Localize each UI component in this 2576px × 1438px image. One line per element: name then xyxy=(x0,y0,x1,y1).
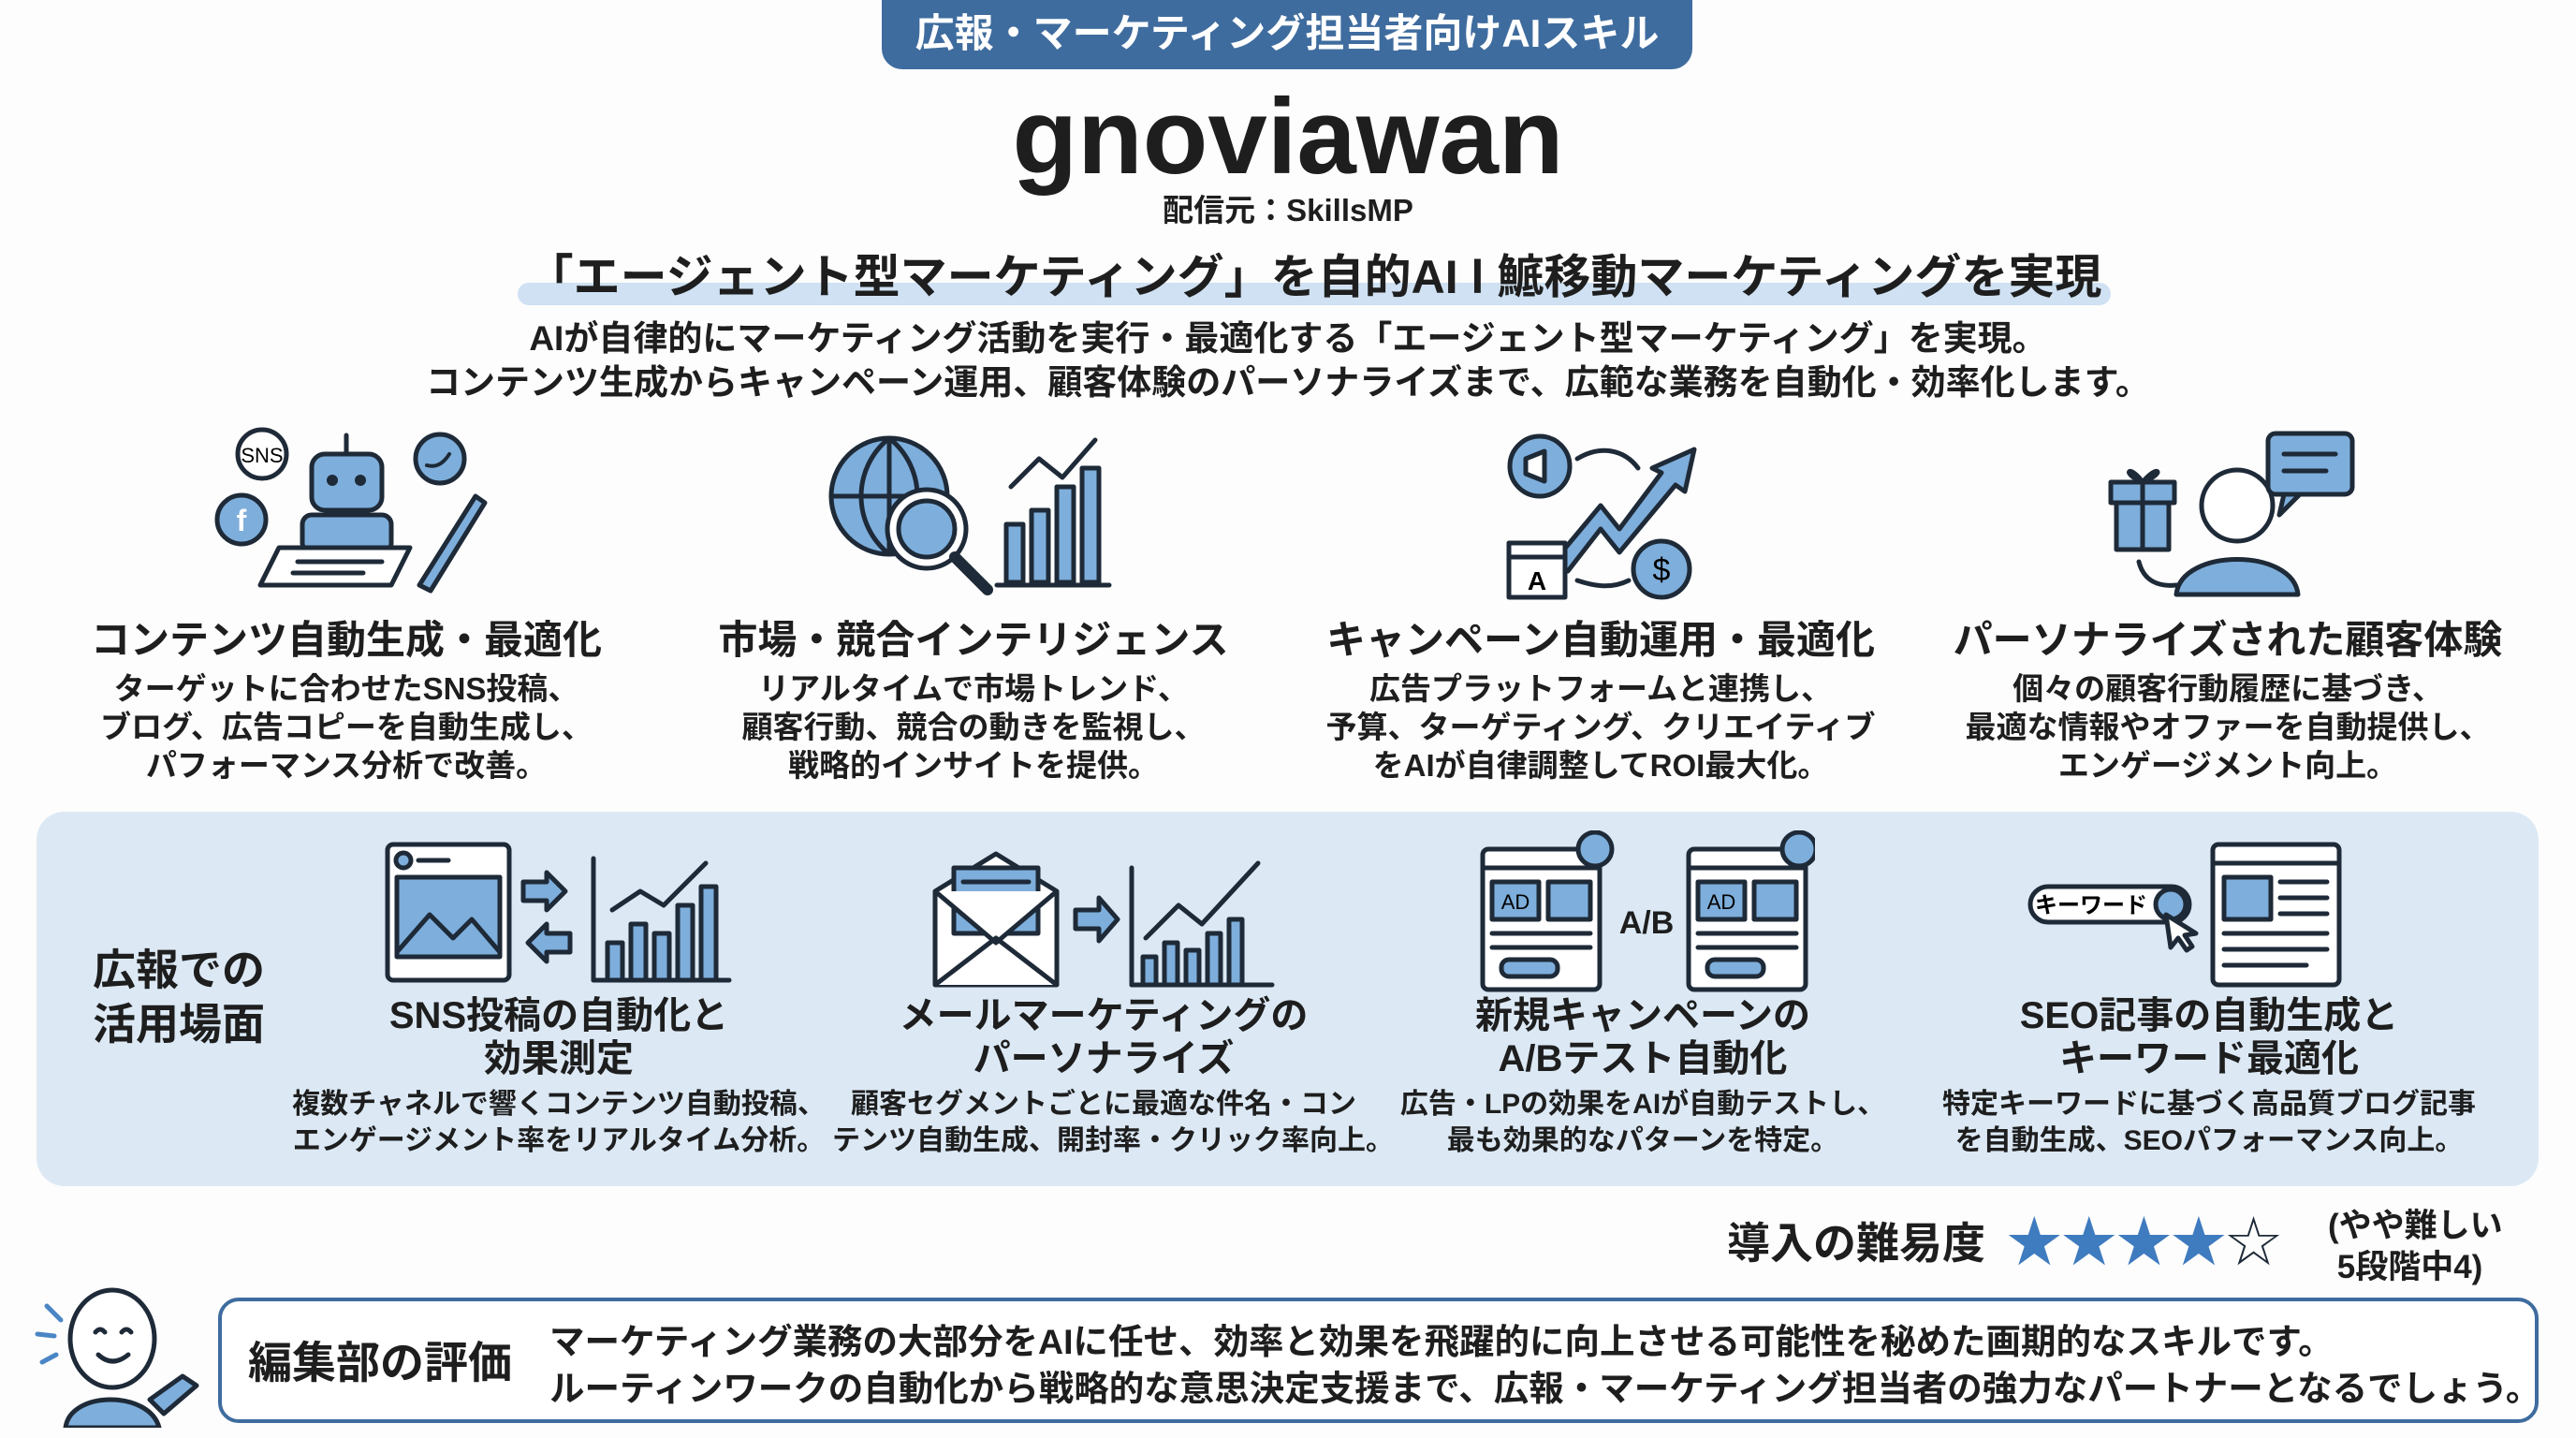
icon: SEO keyword: キーワード xyxy=(2035,893,2147,918)
icon: content generation robot: SNS xyxy=(241,444,284,467)
evaluation text: ルーティンワークの自動化から戦略的な意思決定支援まで、広報・マーケティング担当者の強力なパートナーとなるでしょう。 xyxy=(549,1369,2540,1408)
feature: content xyxy=(91,618,602,783)
icon: SEO keyword xyxy=(2027,843,2342,987)
icon: personalized experience xyxy=(2108,431,2355,597)
use case: email: パーソナライズ xyxy=(973,1038,1234,1079)
intro paragraph: AIが自律的にマーケティング活動を実行・最適化する「エージェント型マーケティング」を実現。 xyxy=(529,319,2047,358)
use case: SEO xyxy=(1942,995,2476,1156)
icon: globe with magnifier and chart xyxy=(829,436,1112,595)
feature: market intelligence: リアルタイムで市場トレンド、 xyxy=(758,671,1189,706)
use case: SEO: キーワード最適化 xyxy=(2059,1038,2359,1079)
icon: A/B test xyxy=(1481,830,1815,992)
use case: A/B: 広告・LPの効果をAIが自動テストし、 xyxy=(1400,1089,1885,1120)
feature: personalization: パーソナライズされた顧客体験 xyxy=(1954,618,2502,662)
top banner xyxy=(882,0,1692,69)
evaluation text xyxy=(549,1322,2540,1408)
feature: market intelligence: 顧客行動、競合の動きを監視し、 xyxy=(741,710,1206,744)
use case: SEO: 特定キーワードに基づく高品質ブログ記事 xyxy=(1942,1089,2476,1120)
icon: A/B test: AD xyxy=(1707,890,1735,914)
icon: content generation robot xyxy=(215,427,487,594)
difficulty rating: 導入の難易度 xyxy=(1727,1219,1985,1268)
feature: market intelligence xyxy=(718,618,1229,783)
use case: A/B xyxy=(1400,995,1885,1156)
panel heading: 広報での xyxy=(93,946,265,994)
feature: content: ブログ、広告コピーを自動生成し、 xyxy=(100,710,593,744)
panel: editor evaluation xyxy=(218,1298,2539,1423)
use case: email xyxy=(832,995,1394,1156)
use case: SNS: エンゲージメント率をリアルタイム分析。 xyxy=(293,1125,825,1156)
icon: campaign automation xyxy=(1507,434,1696,599)
use case: email: メールマーケティングの xyxy=(900,995,1308,1036)
feature: content: パフォーマンス分析で改善。 xyxy=(146,748,547,783)
feature: campaign: キャンペーン自動運用・最適化 xyxy=(1326,618,1875,662)
heading with highlight: 「エージェント型マーケティング」を自的AI l 鯳移動マーケティングを実現 xyxy=(527,251,2101,303)
use case: A/B: 新規キャンペーンの xyxy=(1475,995,1810,1036)
icon: editor character xyxy=(36,1288,198,1428)
feature: content: ターゲットに合わせたSNS投稿、 xyxy=(114,671,578,706)
difficulty rating: 5段階中4) xyxy=(2337,1249,2482,1285)
icon: SNS post xyxy=(386,843,732,983)
use case: A/B: 最も効果的なパターンを特定。 xyxy=(1447,1125,1838,1156)
use case: SNS xyxy=(292,995,826,1156)
stars: ★★★★☆ xyxy=(2004,1202,2278,1281)
icon: A/B test: A/B xyxy=(1619,905,1674,941)
feature: campaign: をAIが自律調整してROI最大化。 xyxy=(1373,748,1828,783)
use case: SEO: SEO記事の自動生成と xyxy=(2020,995,2398,1036)
feature: personalization: エンゲージメント向上。 xyxy=(2058,748,2397,783)
difficulty rating: (やや難しい xyxy=(2328,1208,2503,1244)
intro paragraph xyxy=(426,319,2150,402)
use case: A/B: A/Bテスト自動化 xyxy=(1499,1038,1787,1079)
difficulty rating xyxy=(1727,1202,2503,1285)
feature: personalization: 最適な情報やオファーを自動提供し、 xyxy=(1966,710,2490,744)
source: 配信元：SkillsMP xyxy=(1163,193,1413,227)
feature: market intelligence: 戦略的インサイトを提供。 xyxy=(788,748,1159,783)
panel heading xyxy=(93,946,265,1049)
use case: SEO: を自動生成、SEOパフォーマンス向上。 xyxy=(1955,1125,2463,1156)
use case: email: テンツ自動生成、開封率・クリック率向上。 xyxy=(832,1125,1394,1156)
use case: SNS: 複数チャネルで響くコンテンツ自動投稿、 xyxy=(292,1089,826,1120)
evaluation text: マーケティング業務の大部分をAIに任せ、効率と効果を飛躍的に向上させる可能性を秘めた画期的なスキルです。 xyxy=(549,1322,2334,1361)
icon: email xyxy=(932,852,1275,987)
use case: SNS: 効果測定 xyxy=(484,1038,634,1079)
top banner: 広報・マーケティング担当者向けAIスキル xyxy=(915,11,1659,55)
title: gnoviawan xyxy=(1012,78,1564,197)
icon: content generation robot: f xyxy=(237,504,247,537)
feature: campaign xyxy=(1325,618,1876,783)
panel: use cases xyxy=(37,812,2539,1186)
feature: personalization xyxy=(1954,618,2502,783)
use case: SNS: SNS投稿の自動化と xyxy=(389,995,728,1036)
icon: campaign automation: $ xyxy=(1653,552,1671,588)
feature: campaign: 広告プラットフォームと連携し、 xyxy=(1369,671,1832,706)
use case: email: 顧客セグメントごとに最適な件名・コン xyxy=(851,1089,1356,1120)
feature: content: コンテンツ自動生成・最適化 xyxy=(91,618,602,662)
feature: personalization: 個々の顧客行動履歴に基づき、 xyxy=(2012,671,2443,706)
feature: campaign: 予算、ターゲティング、クリエイティブ xyxy=(1325,710,1876,744)
icon: A/B test: AD xyxy=(1501,890,1530,914)
panel heading: 活用場面 xyxy=(93,1000,265,1049)
icon: campaign automation: A xyxy=(1528,566,1546,595)
intro paragraph: コンテンツ生成からキャンペーン運用、顧客体験のパーソナライズまで、広範な業務を自動化・効率化します。 xyxy=(426,363,2150,402)
evaluation label: 編集部の評価 xyxy=(248,1338,512,1387)
feature: market intelligence: 市場・競合インテリジェンス xyxy=(718,618,1229,662)
